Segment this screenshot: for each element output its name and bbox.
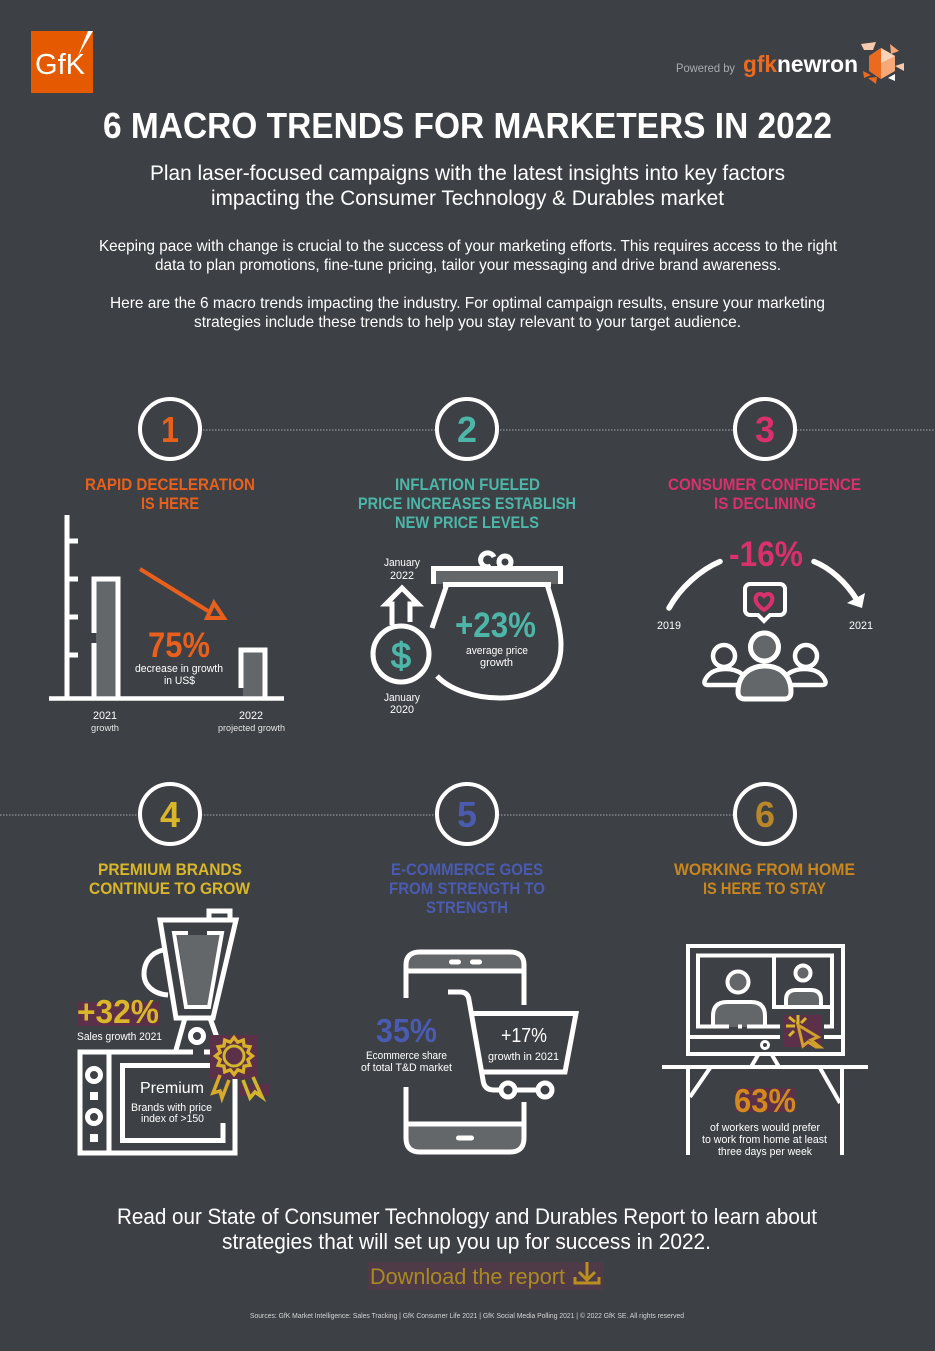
- heading 2: PRICE INCREASES ESTABLISH: [358, 494, 576, 513]
- subtitle: [150, 162, 785, 210]
- year labels: 2021: [849, 620, 873, 632]
- icon: blender: [80, 911, 236, 1153]
- stat 35%: of total T&D market: [361, 1062, 452, 1074]
- date labels: [384, 557, 420, 716]
- stat +23%: average price: [466, 645, 528, 657]
- logo: powered by gfknewron: newron: [777, 51, 858, 77]
- number badge 6: 6: [755, 794, 775, 835]
- panel 6: working from home: [662, 784, 868, 1158]
- intro text: data to plan promotions, fine-tune pricing, tailor your messaging and drive brand awareness.: [155, 257, 781, 274]
- number badge 6: [735, 784, 795, 844]
- logo: GfK: [31, 31, 93, 93]
- stat +23%: [455, 606, 536, 669]
- subtitle: impacting the Consumer Technology & Durables market: [211, 187, 724, 210]
- logo: powered by gfknewron: [676, 42, 904, 84]
- stat 35%: 35%: [376, 1012, 437, 1049]
- heading 2: INFLATION FUELED: [395, 475, 540, 494]
- icon: dollar coin with arrow: [373, 588, 429, 682]
- icon: heart speech bubble: [745, 584, 785, 621]
- icon: monitor video call: [688, 946, 843, 1067]
- logo: GfK: GfK: [35, 49, 86, 81]
- panel 5: e-commerce: [361, 784, 576, 1152]
- intro text: Keeping pace with change is crucial to the success of your marketing efforts. This requires access to the right: [99, 238, 838, 255]
- stat +17%: [488, 1025, 559, 1063]
- date labels: January: [384, 557, 420, 569]
- stat +32%: +32%: [77, 993, 159, 1030]
- stat +23%: +23%: [455, 606, 536, 645]
- subtitle: Plan laser-focused campaigns with the latest insights into key factors: [150, 162, 785, 185]
- date labels: January: [384, 692, 420, 704]
- arc arrow 2019 to 2021: [669, 562, 865, 608]
- premium label: Premium: [140, 1080, 204, 1097]
- intro text: strategies include these trends to help you stay relevant to your target audience.: [194, 314, 741, 331]
- panel 1: rapid deceleration: [49, 399, 285, 734]
- stat 75%: decrease in growth: [135, 663, 223, 675]
- heading 4: [89, 860, 251, 898]
- stat 75%: in US$: [164, 675, 195, 687]
- premium label: index of >150: [141, 1113, 204, 1125]
- closing text: Read our State of Consumer Technology and Durables Report to learn about: [117, 1204, 817, 1229]
- icon: desk: [662, 1067, 868, 1155]
- heading 4: PREMIUM BRANDS: [98, 860, 242, 879]
- premium label: Brands with price: [131, 1102, 212, 1114]
- heading 3: IS DECLINING: [714, 494, 816, 513]
- icon: purse: [432, 553, 561, 698]
- arrow down: [140, 569, 224, 618]
- icon: cursor click: [784, 1015, 822, 1047]
- stat 63%: 63%: [734, 1082, 796, 1119]
- heading 3: [668, 475, 861, 513]
- icon: smartphone: [406, 952, 524, 1152]
- number badge 4: [140, 784, 200, 844]
- year labels: 2019: [657, 620, 681, 632]
- stat +17%: growth in 2021: [488, 1051, 559, 1063]
- icon: people group: [704, 633, 826, 699]
- logo: powered by gfknewron: Powered by: [676, 61, 735, 75]
- number badge 5: 5: [457, 794, 477, 835]
- stat +17%: +17%: [501, 1025, 547, 1047]
- heading 5: [389, 860, 545, 917]
- icon: shopping cart: [448, 992, 576, 1097]
- heading 6: WORKING FROM HOME: [674, 860, 855, 879]
- download link: Download the report: [370, 1264, 565, 1289]
- number badge 2: 2: [457, 409, 477, 450]
- stat 63%: [702, 1082, 827, 1158]
- heading 1: IS HERE: [141, 494, 199, 513]
- stat 35%: [361, 1012, 452, 1074]
- heading 2: [358, 475, 576, 532]
- number badge 3: [735, 399, 795, 459]
- stat 75%: [135, 626, 223, 687]
- axis labels: projected growth: [218, 723, 285, 734]
- heading 3: CONSUMER CONFIDENCE: [668, 475, 861, 494]
- number badge 3: 3: [755, 409, 775, 450]
- stat -16%: -16%: [729, 535, 803, 574]
- icon: dollar coin with arrow: $: [391, 635, 411, 676]
- year labels: [657, 620, 873, 632]
- axis labels: 2022: [239, 710, 263, 722]
- icon: rosette: [210, 1035, 270, 1098]
- number badge 2: [437, 399, 497, 459]
- number badge 4: 4: [160, 794, 180, 835]
- stat +23%: growth: [480, 657, 513, 669]
- stat 63%: three days per week: [718, 1146, 812, 1158]
- number badge 1: 1: [161, 409, 179, 450]
- axis labels: 2021: [93, 710, 117, 722]
- axis labels: growth: [91, 723, 119, 734]
- closing text: [117, 1204, 817, 1254]
- closing text: strategies that will set up you up for success in 2022.: [222, 1229, 711, 1254]
- heading 1: [85, 475, 255, 513]
- premium label: [131, 1080, 212, 1125]
- title: 6 MACRO TRENDS FOR MARKETERS IN 2022: [103, 105, 832, 146]
- date labels: 2022: [390, 570, 414, 582]
- stat 63%: to work from home at least: [702, 1134, 827, 1146]
- date labels: 2020: [390, 704, 414, 716]
- logo: powered by gfknewron: gfk: [743, 51, 777, 77]
- panel 2: inflation: [358, 399, 576, 716]
- number badge 5: [437, 784, 497, 844]
- stat 35%: Ecommerce share: [366, 1050, 447, 1062]
- stat 75%: 75%: [148, 626, 210, 665]
- heading 6: IS HERE TO STAY: [703, 879, 827, 898]
- heading 5: STRENGTH: [426, 898, 508, 917]
- intro text: [99, 238, 838, 331]
- axis labels: [91, 710, 285, 734]
- heading 4: CONTINUE TO GROW: [89, 879, 251, 898]
- panel 3: consumer confidence: [657, 399, 873, 699]
- heading 5: E-COMMERCE GOES: [391, 860, 543, 879]
- heading 5: FROM STRENGTH TO: [389, 879, 545, 898]
- intro text: Here are the 6 macro trends impacting the industry. For optimal campaign results, ensure your marketing: [110, 295, 825, 312]
- heading 2: NEW PRICE LEVELS: [395, 513, 539, 532]
- stat +32%: Sales growth 2021: [77, 1031, 162, 1043]
- panel 4: premium brands: [77, 784, 270, 1153]
- sources: Sources: GfK Market Intelligence: Sales Tracking | GfK Consumer Life 2021 | GfK Social Media Polling 2021 | © 2022 GfK SE. All rights reserved: [250, 1312, 684, 1320]
- stat 63%: of workers would prefer: [710, 1122, 820, 1134]
- heading 1: RAPID DECELERATION: [85, 475, 255, 494]
- heading 6: [674, 860, 855, 898]
- bar chart: [49, 515, 284, 698]
- number badge 1: [140, 399, 200, 459]
